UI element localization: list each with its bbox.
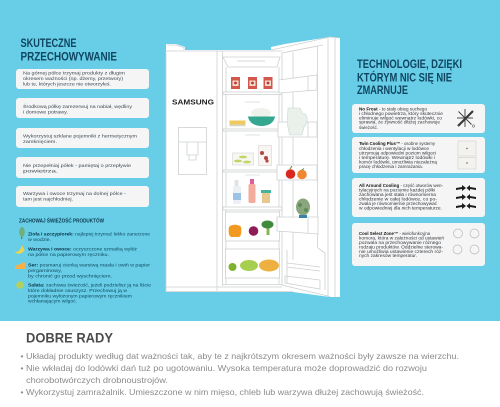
icon: four temperature modes <box>453 229 479 254</box>
good tips list: Wykorzystuj zamrażalnik. Umieszczone w nim mięso, chleb lub warzywa dłużej zachowują świeżość. <box>26 387 424 397</box>
tip card: glass containers <box>16 128 149 148</box>
good tips list: Nie wkładaj do lodówki dań tuż po ugotowaniu. Wysoka temperatura może doprowadzić do rozwoju <box>26 363 427 373</box>
card: Cool Select Zone: nych zakresów temperatur. <box>359 253 417 258</box>
icon: snowflake with slash <box>457 109 475 127</box>
card: Twin Cooling Plus: komór lodówki, umożliwia niezależną <box>359 159 438 164</box>
card: Cool Select Zone <box>352 223 485 266</box>
tip card: glass containers: zamknięciem. <box>23 139 57 145</box>
tip card: do not overfill: powietrza. <box>23 168 58 174</box>
right column heading: TECHNOLOGIE, DZIĘKI <box>357 57 462 71</box>
blue background panel <box>0 0 500 321</box>
good tips list <box>20 351 459 397</box>
samsung logo: SAMSUNG <box>172 100 215 107</box>
left column heading: SKUTECZNE <box>20 36 77 50</box>
grapes <box>240 260 258 271</box>
left column heading <box>20 36 117 64</box>
good tips list: • <box>20 387 24 397</box>
door bin: third <box>277 165 317 180</box>
tip card: top shelf <box>16 69 149 89</box>
good tips list: • <box>20 363 24 373</box>
orange <box>297 168 307 179</box>
item: herbs: w wodzie. <box>28 237 51 243</box>
card: All Around Cooling <box>352 178 485 217</box>
tip card: top shelf: lub te, których jeszcze nie otworzyłeś. <box>23 82 111 88</box>
card: All Around Cooling: tylacyjnych na poziomie każdej półki <box>359 187 435 192</box>
card: No Frost: eliminuje wilgoć wewnątrz lodówki, co <box>359 115 443 120</box>
good tips heading: DOBRE RADY <box>26 329 114 345</box>
card: Twin Cooling Plus: utrzymują odpowiedni poziom wilgoci <box>359 151 436 156</box>
item: cheese: pergaminowy, <box>28 268 62 274</box>
tip card: top shelf: Na górnej półce trzymaj produkty z długim <box>23 70 125 76</box>
tip card: vegetables and fruit <box>16 186 149 207</box>
tip card: vegetables and fruit: Warzywa i owoce trzymaj na dolnej półce - <box>23 191 126 197</box>
freshness list <box>15 227 151 305</box>
right column heading: KTÓRYM NIC SIĘ NIE <box>357 71 452 85</box>
item: herbs <box>19 227 150 243</box>
tip card: top shelf: okresem ważności (np. dżemy, przetwory) <box>23 76 123 82</box>
card: All Around Cooling: All Around Cooling - część otworów wen- <box>359 183 443 188</box>
good tips list: Układaj produkty według dat ważności tak, aby te z najkrótszym okresem ważności były zawsze na wierzchu. <box>26 351 459 361</box>
card: All Around Cooling: chłodzenie w całej lodówce, co po- <box>359 196 438 201</box>
tip card: middle shelf: Środkową półkę zarezerwuj na nabiał, wędliny <box>23 102 133 110</box>
card: Cool Select Zone: Cool Select Zone™ - wielofunkcyjna <box>359 231 430 236</box>
tip card: do not overfill <box>16 157 149 178</box>
item: lettuce: Sałata: zachowa świeżość, jeżeli podzielisz ją na liście <box>28 283 151 289</box>
panel: storage tips <box>16 69 149 207</box>
item: cheese: by chronić go przed wyschnięciem. <box>28 274 112 280</box>
card: Cool Select Zone: rodzaju produktów. Oddzielne sterowa- <box>359 244 444 249</box>
fridge left cabinet <box>166 45 293 292</box>
item: vegetables and fruit: Warzywa i owoce: oczyszczone szmatką wyłóż <box>28 247 138 253</box>
card: No Frost: No Frost - to stały obieg suchego <box>359 106 428 112</box>
icon: banana <box>15 245 24 254</box>
jam jars <box>231 77 272 89</box>
tray of strawberries <box>258 146 272 166</box>
butter <box>230 120 246 126</box>
lime <box>228 263 236 271</box>
right column heading: ZMARNUJE <box>357 83 408 97</box>
plate of limes <box>232 153 254 165</box>
white tips panel background <box>0 321 500 407</box>
item: cheese <box>15 262 150 280</box>
card: No Frost <box>352 104 485 133</box>
door bin: top <box>279 75 317 93</box>
right column heading <box>357 57 462 97</box>
good tips list: chorobotwórczych drobnoustrojów. <box>26 375 168 385</box>
card: Twin Cooling Plus <box>352 137 485 173</box>
card: No Frost: sprawia, że żywność dłużej zachowuje <box>359 120 441 125</box>
item: herbs: Zioła i szczypiorek: najlepiej trzymać lekko zanurzone <box>28 232 150 238</box>
tip card: vegetables and fruit: tam jest najchłodniej. <box>23 196 73 202</box>
icon: two compartments <box>458 141 476 169</box>
beetroot <box>249 226 258 236</box>
icon: airflow arrows <box>456 185 476 209</box>
card: Cool Select Zone: pozwala na przechowywanie różnego <box>359 240 442 245</box>
broccoli <box>262 220 274 235</box>
card: Cool Select Zone: komora, która w zależności od ustawień <box>359 235 445 240</box>
tip card: do not overfill: Nie przepełniaj półek - pamiętaj o przepływie <box>23 163 131 169</box>
item: lettuce <box>16 281 151 305</box>
door bin: fourth <box>277 217 318 234</box>
herb pot <box>296 198 310 218</box>
yogurt cup <box>261 190 271 203</box>
fridge illustration <box>166 37 340 297</box>
pink juice bottle <box>248 179 256 203</box>
item: vegetables and fruit: na półce na papierowym ręczniku. <box>28 252 109 258</box>
open fridge door <box>271 37 340 297</box>
icon: cheese <box>15 262 26 269</box>
apple <box>286 166 295 179</box>
left column heading: PRZECHOWYWANIE <box>20 50 117 64</box>
tip card: glass containers: Wykorzystuj szklane pojemniki z hermetycznym <box>23 133 137 139</box>
item: cheese: Ser: posmaruj cienką warstwą masła i owiń w papier <box>28 263 150 269</box>
tip card: middle shelf: i domowe potrawy. <box>23 110 68 116</box>
door bin: second <box>278 122 317 137</box>
bell pepper <box>229 225 241 237</box>
icon: lettuce <box>16 281 24 289</box>
card: Twin Cooling Plus: i temperaturę. Wewnątrz lodówki i <box>359 155 435 160</box>
item: lettuce: pojemniku wyłożonym papierowym ręcznikiem <box>28 293 132 299</box>
item: vegetables and fruit <box>15 245 138 258</box>
card: Twin Cooling Plus: pracę chłodzenia i zamrażania. <box>359 164 423 169</box>
tip card: middle shelf <box>16 98 149 118</box>
freshness heading: ZACHOWAJ ŚWIEŻOŚĆ PRODUKTÓW <box>19 217 104 225</box>
water dispenser <box>178 128 206 174</box>
milk bottle <box>233 180 241 204</box>
card: Twin Cooling Plus: Twin Cooling Plus™ - osobne systemy <box>359 141 436 146</box>
milk jug <box>288 108 307 135</box>
fridge interior shelves <box>223 57 282 284</box>
bowl of rice <box>248 108 275 126</box>
item: lettuce: wchłaniającym wilgoć. <box>28 299 77 305</box>
good tips section <box>20 329 459 397</box>
card: No Frost: świeżość. <box>359 125 378 130</box>
card: Twin Cooling Plus: chłodzenia i wentylacji w lodówce <box>359 146 430 151</box>
card: All Around Cooling: zachowana jest stała i równomierna <box>359 192 437 197</box>
icon: herbs <box>19 227 25 239</box>
fridge body silhouette <box>166 37 340 297</box>
item: lettuce: które dokładnie osuszysz. Przechowuj ją w <box>28 288 127 294</box>
good tips list: • <box>20 351 24 361</box>
melon <box>259 260 279 272</box>
card: Cool Select Zone: nie umożliwia ustawienie czterech róż- <box>359 249 444 254</box>
card: All Around Cooling: zwala je równomiernie przechowywać <box>359 201 438 206</box>
panel: technologies <box>352 104 485 266</box>
card: All Around Cooling: w odpowiedniej dla nich temperaturze. <box>359 205 442 210</box>
card: No Frost: i chłodnego powietrza, który skutecznie <box>359 111 444 116</box>
